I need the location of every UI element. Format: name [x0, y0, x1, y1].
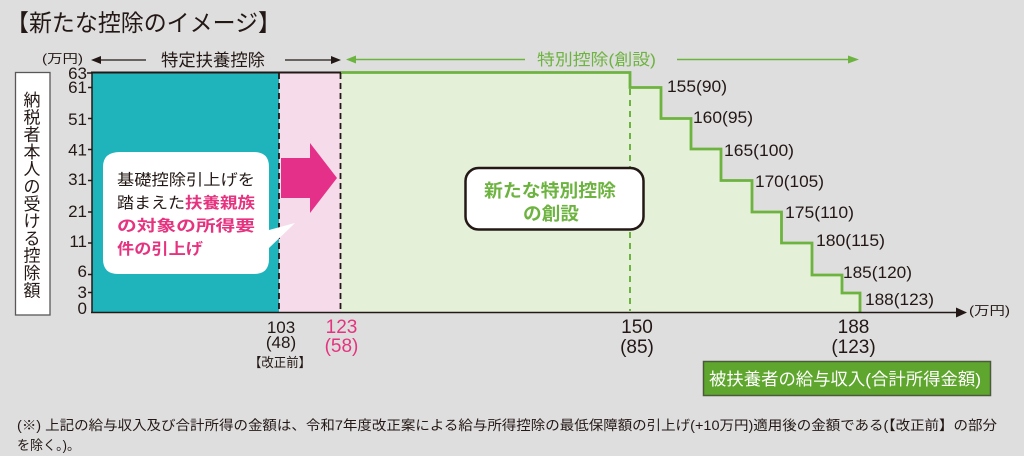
y-axis tick labels: 41: [68, 140, 87, 160]
x label 123: (58): [325, 336, 358, 357]
y-axis tick labels: [68, 64, 87, 318]
x label 103: 【改正前】: [249, 355, 311, 370]
y-axis title box: 納税者本人の受ける控除額: [24, 91, 40, 300]
x axis arrow: [91, 308, 967, 318]
footnote: [17, 417, 998, 453]
x label 188: (123): [831, 337, 876, 358]
footnote: を除く。)。: [17, 438, 80, 453]
y axis with ticks: [87, 72, 92, 313]
top line: [91, 72, 341, 74]
x label 103: 103: [267, 318, 295, 337]
x label 123: 123: [326, 317, 357, 338]
range arrow: specific dependent deduction: [91, 51, 341, 70]
panel: new special deduction area: [341, 73, 860, 312]
title: 【新たな控除のイメージ】: [6, 10, 281, 36]
panel: existing deduction area: [92, 73, 279, 312]
callout: new special deduction: [466, 168, 644, 230]
dashed line at 150: [629, 89, 631, 311]
callout: raised income requirement: 扶養親族: [185, 193, 256, 212]
y-axis tick labels: 63: [68, 64, 87, 83]
callout: new special deduction: 新たな特別控除: [484, 181, 616, 201]
step line: [341, 72, 860, 312]
x label 103: (48): [266, 333, 296, 352]
x label 103: [249, 318, 311, 370]
step labels: 175(110): [785, 203, 854, 222]
x label 123: [325, 317, 358, 357]
x label 188: [831, 317, 876, 358]
range arrow: specific dependent deduction: 特定扶養控除: [161, 51, 265, 70]
y-axis title box: [16, 72, 50, 315]
step labels: [667, 77, 934, 309]
step labels: 188(123): [865, 290, 934, 309]
icon: pink arrow: [281, 143, 337, 213]
y-axis tick labels: 0: [78, 299, 87, 318]
y-axis tick labels: 3: [78, 283, 87, 302]
callout: raised income requirement: 踏まえた: [117, 194, 185, 212]
x label 150: [620, 317, 654, 358]
dashed line at 123: [340, 73, 342, 311]
x label 188: 188: [838, 317, 869, 338]
legend box: dependent salary income: [704, 362, 990, 396]
x-axis unit label: (万円): [969, 304, 1010, 318]
y-axis tick labels: 21: [68, 202, 87, 221]
x label 150: 150: [621, 317, 653, 338]
step labels: 185(120): [843, 263, 912, 282]
panel: raised income area: [279, 73, 341, 312]
callout: raised income requirement: の対象の所得要: [117, 216, 255, 235]
legend box: dependent salary income: 被扶養者の給与収入(合計所得金額): [709, 370, 981, 389]
y-axis unit label: (万円): [42, 52, 83, 66]
callout: raised income requirement: 基礎控除引上げを: [117, 171, 255, 189]
step labels: 155(90): [667, 77, 727, 96]
range arrow: special deduction: [346, 51, 859, 69]
x label 150: (85): [620, 337, 654, 358]
range arrow: special deduction: 特別控除(創設): [537, 51, 656, 69]
step labels: 165(100): [724, 141, 794, 160]
y-axis tick labels: 6: [78, 262, 87, 281]
callout: new special deduction: の創設: [523, 204, 579, 224]
step labels: 170(105): [755, 172, 824, 191]
dashed line at 103: [278, 73, 280, 311]
y-axis tick labels: 61: [68, 78, 87, 97]
callout: raised income requirement: [103, 152, 295, 274]
step labels: 160(95): [693, 108, 753, 127]
y-axis tick labels: 11: [69, 232, 87, 251]
callout: raised income requirement: 件の引上げ: [117, 240, 204, 258]
footnote: (※) 上記の給与収入及び合計所得の金額は、令和7年度改正案による給与所得控除の最低保障額の引上げ(+10万円)適用後の金額である(【改正前】の部分: [17, 417, 998, 433]
y-axis tick labels: 51: [68, 110, 87, 129]
y-axis tick labels: 31: [68, 170, 87, 189]
step labels: 180(115): [816, 231, 885, 250]
